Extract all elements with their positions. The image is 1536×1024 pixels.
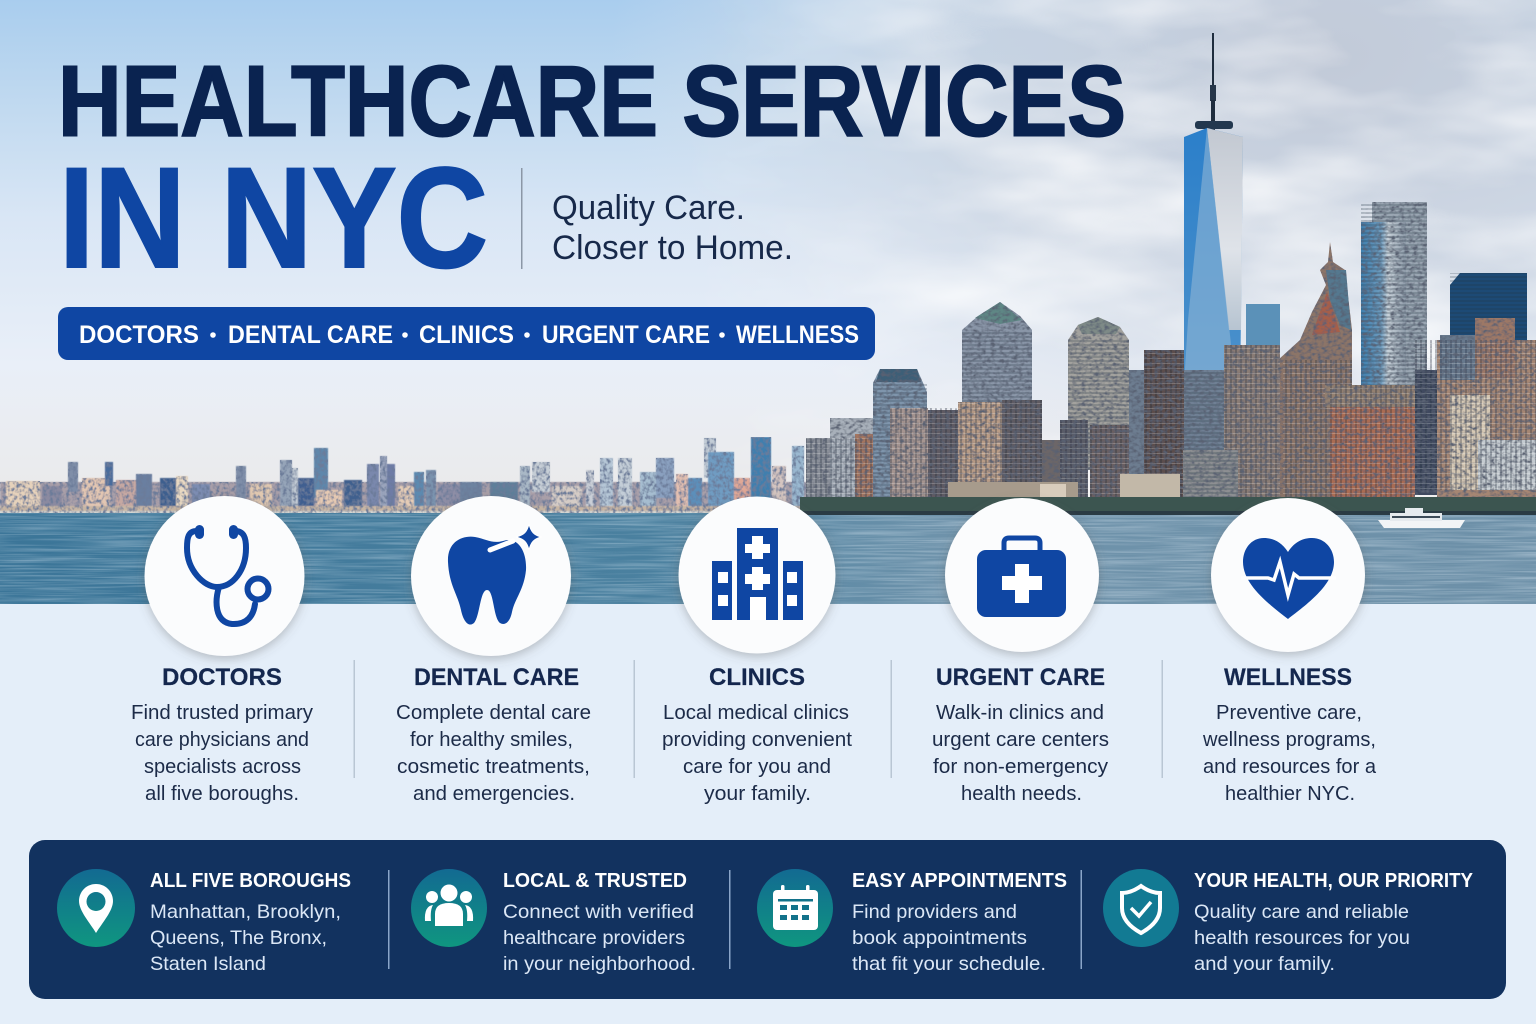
info: all five boroughs: ALL FIVE BOROUGHS [150,870,351,892]
bottom info panel [29,840,1506,999]
info: your health, our priority: and your family. [1194,953,1335,975]
One World Trade Center [1184,33,1243,400]
mid towers at base [1183,345,1280,500]
service column: clinics [662,496,852,805]
background: sky [0,0,1536,520]
description: clinics: care for you and [683,755,831,778]
info: all five boroughs [57,869,351,975]
title line 1: HEALTHCARE SERVICES [58,46,1126,158]
heading: dental care: DENTAL CARE [414,664,579,691]
heading: doctors: DOCTORS [162,664,282,691]
tagline [521,168,793,269]
banner: service list: WELLNESS [736,321,859,349]
description: doctors: all five boroughs. [145,782,299,805]
description: clinics [662,701,852,805]
description: wellness: and resources for a [1203,755,1377,778]
dome tower [958,302,1062,502]
info: local and trusted: in your neighborhood. [503,953,696,975]
info: easy appointments: book appointments [852,927,1027,949]
description: doctors: care physicians and [135,728,309,751]
banner: service list: CLINICS [419,321,514,349]
info: easy appointments: EASY APPOINTMENTS [852,870,1067,892]
heading: wellness: WELLNESS [1224,664,1352,691]
water [0,513,1536,605]
description: dental care: Complete dental care [396,701,591,724]
description: wellness: healthier NYC. [1225,782,1355,805]
description: urgent care: Walk-in clinics and [936,701,1104,724]
info: your health, our priority: health resources for you [1194,927,1410,949]
description: urgent care: for non-emergency [933,755,1109,778]
description: urgent care: health needs. [961,782,1082,805]
banner: service list [58,307,875,360]
description: dental care: for healthy smiles, [410,728,573,751]
info: your health, our priority [1103,869,1474,975]
heading: clinics: CLINICS [709,664,805,691]
icon: people [411,869,487,947]
banner: service list: DENTAL CARE [228,321,393,349]
info: easy appointments: Find providers and [852,901,1017,923]
gothic brown tower [1278,242,1352,500]
foreground skyline [800,33,1536,528]
right brick buildings [1325,318,1536,500]
second dome tower [1060,317,1184,500]
service column: wellness [1202,498,1377,805]
description: clinics: Local medical clinics [663,701,849,724]
description: dental care [396,701,591,805]
distant skyline [0,437,820,514]
tagline: Quality Care. [552,189,745,227]
icon: shield check [1103,869,1179,947]
info: easy appointments: that fit your schedule. [852,953,1046,975]
lower panel background [0,604,1536,1024]
service column: doctors [131,496,314,805]
description: wellness: Preventive care, [1216,701,1362,724]
description: doctors: Find trusted primary [131,701,314,724]
banner: service list: DOCTORS [79,321,199,349]
info: all five boroughs: Staten Island [150,953,266,975]
icon: first aid kit [945,498,1099,652]
info: local and trusted: healthcare providers [503,927,685,949]
far-left low buildings [806,369,958,500]
info: all five boroughs: Manhattan, Brooklyn, [150,901,341,923]
icon: map pin [57,869,135,947]
service column: urgent care [932,498,1109,805]
tagline: Closer to Home. [552,229,793,267]
shoreline [800,474,1536,515]
banner: service list: URGENT CARE [542,321,710,349]
description: clinics: your family. [704,782,811,805]
info: local and trusted: LOCAL & TRUSTED [503,870,687,892]
icon: calendar [757,869,833,947]
description: wellness [1202,701,1377,805]
icon: tooth [411,496,571,656]
info: local and trusted [411,869,696,975]
icon: hospital building [678,496,836,654]
description: wellness: wellness programs, [1202,728,1376,751]
description: urgent care [932,701,1109,805]
info: your health, our priority: Quality care and reliable [1194,901,1409,923]
tall glass tower, right [1361,202,1427,402]
ferry boat [1378,508,1465,528]
description: doctors: specialists across [144,755,301,778]
description: urgent care: urgent care centers [932,728,1109,751]
info: easy appointments [757,869,1067,975]
heading: urgent care: URGENT CARE [936,664,1105,691]
info: local and trusted: Connect with verified [503,901,694,923]
description: doctors [131,701,314,805]
description: dental care: and emergencies. [413,782,575,805]
description: dental care: cosmetic treatments, [397,755,590,778]
icon: heart with pulse [1211,498,1365,652]
info: your health, our priority: YOUR HEALTH, OUR PRIORITY [1194,870,1474,892]
icon: stethoscope [144,496,304,656]
small blue block [1246,304,1280,354]
service column: dental care [396,496,591,805]
dark blue tower [1450,273,1527,345]
info: all five boroughs: Queens, The Bronx, [150,927,327,949]
title line 2: IN NYC [59,139,488,298]
description: clinics: providing convenient [662,728,852,751]
